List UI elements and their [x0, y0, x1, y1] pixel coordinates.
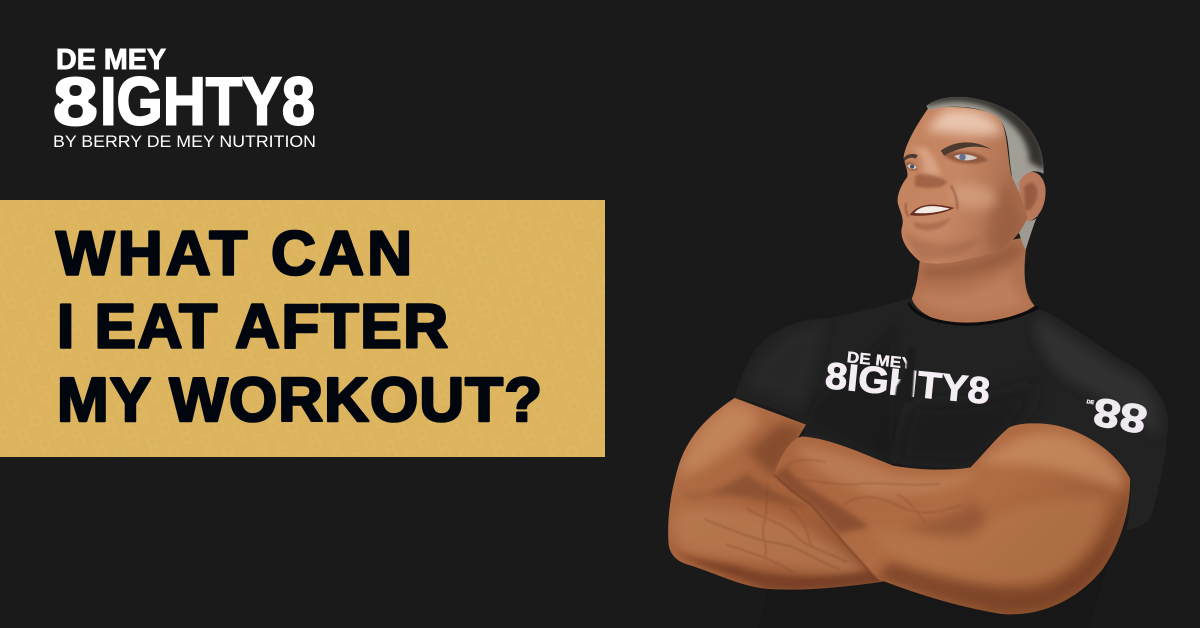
illustration: man with crossed arms [661, 91, 1169, 628]
chin [913, 217, 951, 230]
shirt fold over logo [894, 346, 916, 403]
logo: De Mey Eighty8 by Berry de Mey Nutrition [52, 44, 316, 151]
sleeve logo: 88 [1090, 389, 1150, 441]
smile line [906, 185, 957, 216]
mouth [910, 205, 954, 216]
panel: gold headline banner [0, 200, 605, 457]
hair [926, 96, 1044, 182]
logo line: De Mey: DE MEY [56, 44, 166, 76]
t-shirt [735, 297, 1169, 628]
headline: I EAT AFTER [57, 292, 448, 362]
neck [911, 237, 1035, 326]
logo tagline: BY BERRY DE MEY NUTRITION [53, 132, 316, 151]
eyes [907, 154, 977, 169]
face [898, 107, 1027, 264]
nose shadow [915, 174, 947, 188]
logo mark: mirrored eight: 8 [53, 64, 98, 140]
head [898, 91, 1047, 264]
logo wordmark: IGHTY8: IGHTY8 [100, 64, 315, 140]
shirt logo: 8IGHTY8 [824, 354, 992, 412]
sleeve logo: DE [1086, 399, 1095, 406]
ear [1017, 172, 1046, 222]
headline [56, 220, 542, 435]
arm: right [769, 419, 1136, 619]
collar [909, 303, 1038, 324]
eyebrows [903, 142, 992, 161]
headline: MY WORKOUT? [57, 366, 542, 435]
arm crease [774, 475, 877, 579]
headline: WHAT CAN [56, 220, 412, 288]
eye sockets [905, 151, 988, 171]
arm: left [668, 398, 883, 590]
shirt logo: DE MEY [846, 349, 914, 373]
sideburn [1011, 176, 1038, 250]
